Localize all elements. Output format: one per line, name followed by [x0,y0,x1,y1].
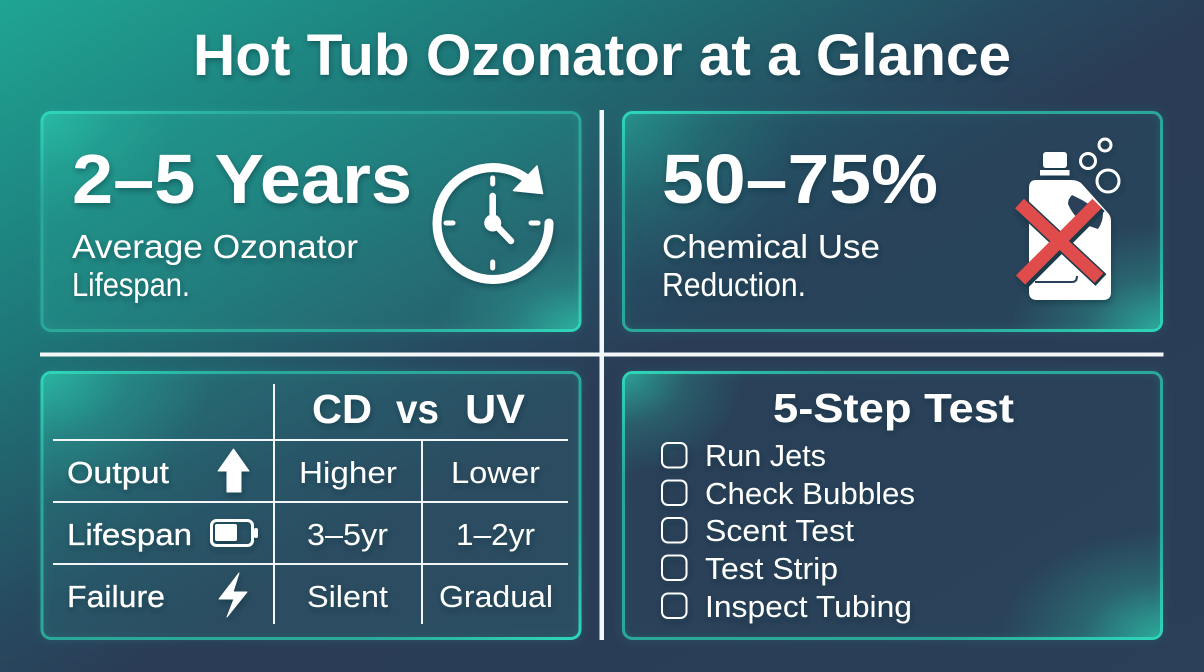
row: failure: Silent [307,579,388,614]
row: output: Output [67,455,169,490]
panel: lifespan [42,112,580,330]
row: lifespan: Lifespan [67,517,192,552]
table header: UV [465,386,526,432]
row: output: Higher [299,455,397,490]
panel: chemical reduction [624,112,1162,330]
row: failure: Failure [67,579,165,614]
panel: CD vs UV comparison [42,372,580,638]
panel: 5-step test [624,372,1162,638]
lifespan value: 2–5 Years [72,140,412,218]
lifespan caption [72,228,358,303]
icon: crossed-out chemical bottle [1020,139,1119,300]
row: output [67,449,540,492]
checklist heading: 5-Step Test [773,385,1014,431]
reduction caption [662,228,880,303]
horizontal divider [40,352,1164,356]
lifespan caption: Average Ozonator [72,228,358,265]
title: Hot Tub Ozonator at a Glance [193,23,1011,88]
reduction caption: Reduction. [662,266,806,303]
row: lifespan [67,517,535,552]
step: scent test: Scent Test [705,513,854,548]
table header: vs [396,386,439,432]
row: lifespan: 1–2yr [456,517,535,552]
reduction caption: Chemical Use [662,228,880,265]
checklist [662,438,915,624]
step: check bubbles: Check Bubbles [705,476,915,511]
reduction value: 50–75% [662,140,938,218]
step: run jets: Run Jets [705,438,826,473]
row: output: Lower [451,455,540,490]
row: failure: Gradual [439,579,553,614]
step: test strip: Test Strip [705,551,838,586]
lifespan caption: Lifespan. [72,266,190,303]
icon: clock with arrow [437,166,549,279]
step: inspect tubing: Inspect Tubing [705,589,912,624]
table header [312,386,526,432]
vertical divider [600,110,604,640]
table grid [53,384,568,624]
row: failure [67,573,553,617]
table header: CD [312,386,372,432]
row: lifespan: 3–5yr [307,517,388,552]
